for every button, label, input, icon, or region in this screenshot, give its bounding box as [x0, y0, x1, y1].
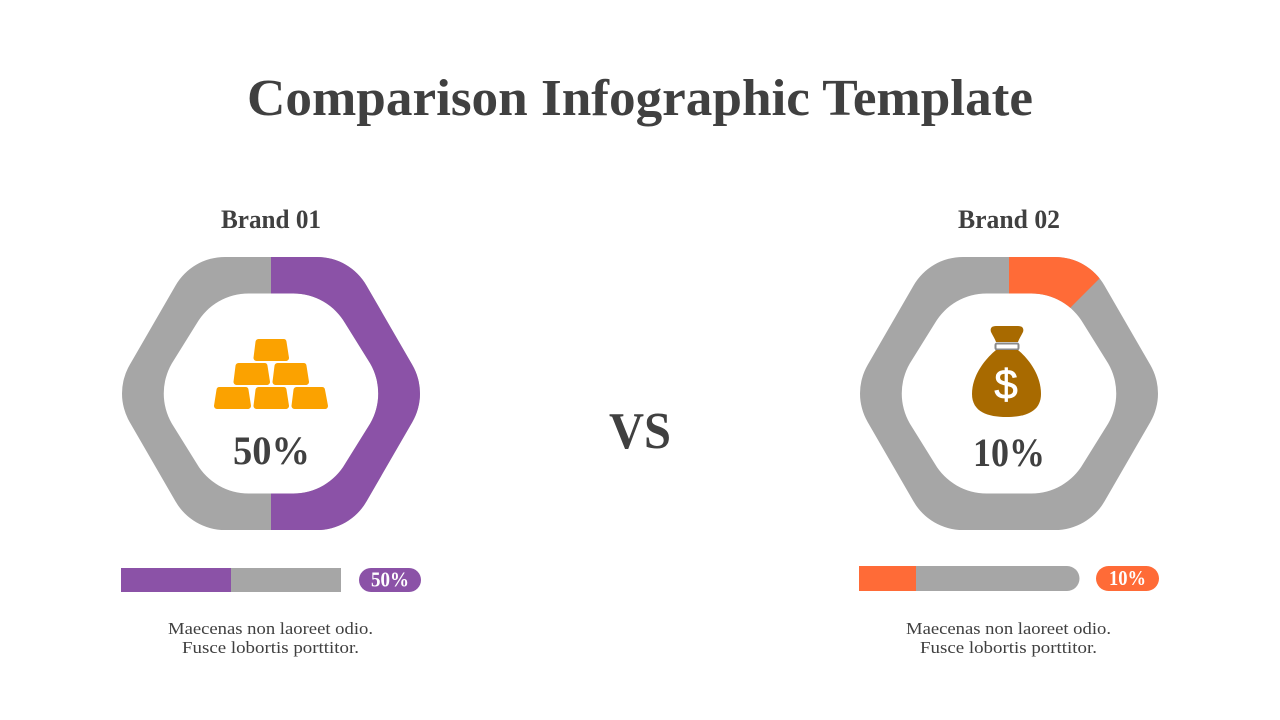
description: brand 01: [168, 619, 373, 657]
hexagon ring chart: 10%: [860, 257, 1158, 530]
vs label: VS: [609, 403, 671, 460]
icon: money bag: [972, 326, 1041, 417]
value: 50%: 50%: [233, 428, 310, 473]
badge: 50%: 50%: [371, 568, 409, 592]
progress bar: 50%: [121, 568, 341, 592]
progress bar: 10%: [859, 566, 1080, 591]
heading: brand 01: Brand 01: [221, 205, 321, 234]
hexagon ring chart: 50%: [122, 257, 420, 530]
description: brand 02: Maecenas non laoreet odio.: [906, 619, 1111, 638]
icon: gold bars: [217, 342, 325, 406]
panel: brand 01: [121, 205, 421, 657]
description: brand 01: Maecenas non laoreet odio.: [168, 619, 373, 638]
badge: 10%: 10%: [1109, 566, 1146, 590]
description: brand 02: [906, 619, 1111, 657]
badge: 50%: [359, 568, 421, 592]
heading: brand 02: Brand 02: [958, 205, 1060, 234]
value: 10%: 10%: [973, 430, 1045, 475]
panel: brand 02: [859, 205, 1159, 657]
infographic canvas: [121, 78, 1159, 656]
description: brand 01: Fusce lobortis porttitor.: [182, 638, 359, 657]
icon: money bag: $: [994, 360, 1018, 408]
badge: 10%: [1096, 566, 1159, 591]
title: Comparison Infographic Template: [247, 70, 1033, 127]
description: brand 02: Fusce lobortis porttitor.: [920, 638, 1097, 657]
